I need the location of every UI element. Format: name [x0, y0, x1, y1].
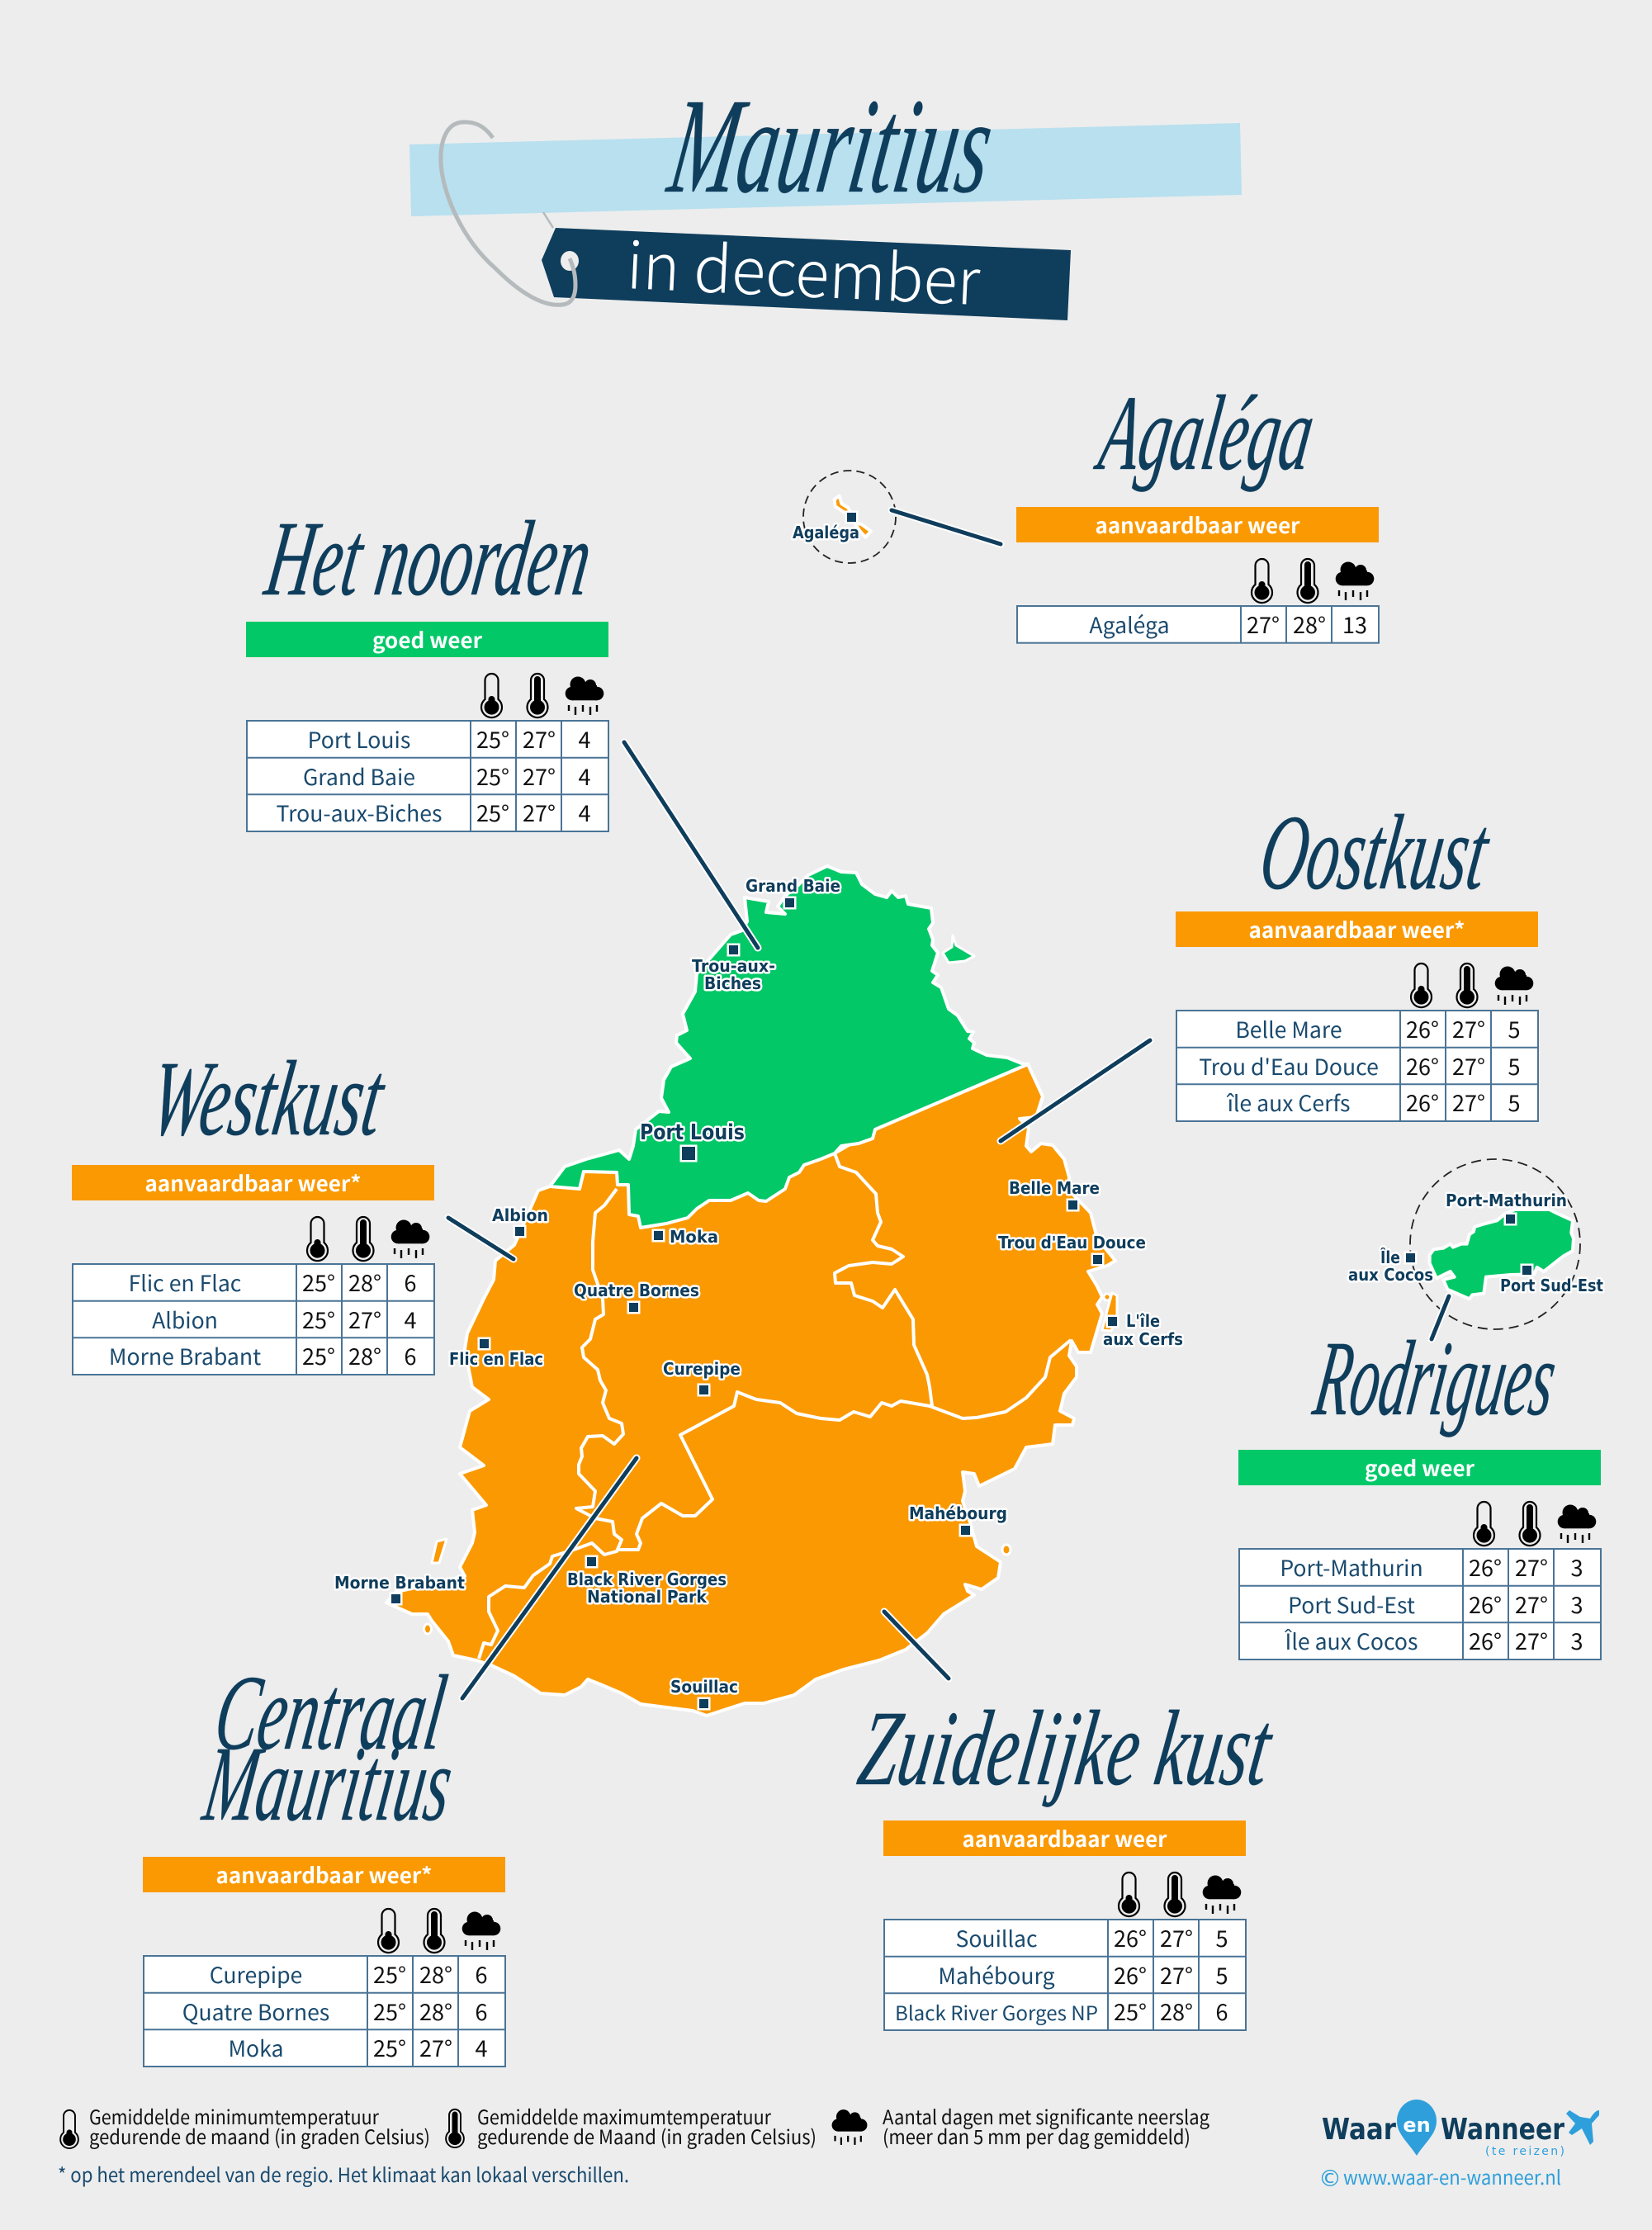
- panel body: [1238, 1450, 1601, 1659]
- table: [144, 1956, 505, 2067]
- table: 6: [405, 1266, 416, 1298]
- title: Mauritius: Mauritius: [660, 70, 1002, 221]
- orange regions: [386, 1064, 1115, 1716]
- table: 4: [405, 1303, 416, 1335]
- table: 25°: [302, 1303, 335, 1335]
- table: 27°: [523, 722, 556, 755]
- table: Port-Mathurin: [1280, 1551, 1423, 1583]
- table: 3: [1570, 1551, 1583, 1583]
- label: Souillac: Souillac: [670, 1677, 738, 1697]
- table: Morne Brabant: [109, 1339, 261, 1371]
- table: 25°: [476, 722, 509, 755]
- label: L'île aux Cerfs: [1103, 1311, 1183, 1349]
- table: Port Sud-Est: [1288, 1588, 1415, 1620]
- dashed circle: [803, 471, 896, 563]
- table: 28°: [1160, 1995, 1193, 2027]
- label: Trou-aux-Biches: Trou-aux-: [692, 956, 775, 976]
- icons: [1411, 963, 1533, 1007]
- table: 27°: [1452, 1049, 1485, 1082]
- table: [1176, 1011, 1538, 1121]
- panel body: [1176, 911, 1538, 1121]
- marker squares: [391, 513, 1531, 1708]
- subtitle: in december: [625, 215, 983, 324]
- table: 28°: [348, 1339, 381, 1371]
- label: Quatre Bornes: Quatre Bornes: [574, 1281, 699, 1300]
- banner: [143, 1857, 505, 1892]
- table: 5: [1215, 1921, 1228, 1953]
- heading: Zuidelijke kust: [851, 1689, 1280, 1808]
- legend: maximum temperature: [446, 2101, 817, 2150]
- table: 26°: [1469, 1551, 1502, 1583]
- table: 27°: [523, 796, 556, 828]
- title band: [409, 123, 1242, 216]
- island: [1430, 1210, 1574, 1299]
- table: 25°: [302, 1266, 335, 1298]
- logo tagline: (te reizen): [1485, 2145, 1564, 2158]
- label: Black River Gorges National Park: Black River Gorges: [567, 1570, 727, 1589]
- table: 26°: [1406, 1049, 1439, 1082]
- heading: [196, 1654, 460, 1844]
- table: Trou d'Eau Douce: [1199, 1049, 1379, 1082]
- table: 6: [1215, 1995, 1228, 2027]
- tag string: [543, 212, 553, 228]
- panel: Agaléga: [1016, 374, 1379, 643]
- icons: [1119, 1873, 1241, 1916]
- banner: [1238, 1450, 1601, 1485]
- banner: aanvaardbaar weer: [1095, 509, 1300, 540]
- heading: Mauritius: [196, 1725, 460, 1844]
- table: 28°: [348, 1266, 381, 1298]
- island: Ile d'Ambre: [943, 935, 974, 963]
- tag hole: [561, 251, 579, 271]
- callout: Westkust: [448, 1218, 514, 1259]
- table: île aux Cerfs: [1227, 1086, 1350, 1118]
- logo wordmark left: Waar: [1322, 2113, 1396, 2147]
- banner: aanvaardbaar weer*: [216, 1859, 433, 1890]
- table: 27°: [1452, 1086, 1485, 1118]
- label: Mahébourg: Mahébourg: [909, 1503, 1007, 1523]
- table: 27°: [1515, 1588, 1548, 1620]
- table: Trou-aux-Biches: [277, 796, 442, 828]
- table: Agaléga: [1089, 608, 1170, 640]
- table: 25°: [373, 1958, 406, 1990]
- table: 27°: [1515, 1624, 1548, 1656]
- table: 26°: [1469, 1588, 1502, 1620]
- legend: maximum temperature: gedurende de Maand (in graden Celsius): [477, 2121, 817, 2150]
- legend: minimum temperature: Gemiddelde minimumtemperatuur: [89, 2101, 380, 2130]
- table: Curepipe: [210, 1958, 302, 1990]
- label: Agaléga: Agaléga: [793, 523, 859, 542]
- label: Flic en Flac: Flic en Flac: [449, 1349, 543, 1369]
- banner: goed weer: [1365, 1452, 1475, 1483]
- table: 6: [476, 1958, 487, 1990]
- table: 4: [578, 722, 591, 755]
- panel body: [883, 1820, 1246, 2030]
- footnote: * op het merendeel van de regio. Het klimaat kan lokaal verschillen.: [58, 2159, 629, 2188]
- heading: Westkust: [143, 1039, 393, 1158]
- website: www.waar-en-wanneer.nl: [1343, 2161, 1561, 2190]
- logo en: en: [1403, 2114, 1431, 2137]
- table: Mahébourg: [938, 1958, 1055, 1991]
- table: Flic en Flac: [129, 1266, 241, 1298]
- table: 27°: [1247, 608, 1280, 640]
- logo wordmark right: Wanneer: [1441, 2113, 1564, 2147]
- panel: Westkust: [72, 1039, 434, 1375]
- banner: goed weer: [372, 624, 483, 655]
- title block: [409, 70, 1242, 324]
- panel: Oostkust: [1176, 793, 1538, 1121]
- label: Morne Brabant: Morne Brabant: [334, 1573, 465, 1593]
- banner: [246, 622, 608, 657]
- website: ©: [1318, 2165, 1342, 2192]
- banner: aanvaardbaar weer*: [1248, 914, 1465, 945]
- table: 5: [1215, 1958, 1228, 1991]
- label: Black River Gorges National Park: National Park: [587, 1587, 708, 1607]
- label: Île aux Cocos: aux Cocos: [1348, 1265, 1433, 1285]
- table: 3: [1570, 1588, 1583, 1620]
- table: 26°: [1114, 1921, 1147, 1953]
- table: [1239, 1549, 1601, 1659]
- map of Mauritius: [386, 866, 1117, 1716]
- panel: Zuidelijke kust: [851, 1689, 1280, 2030]
- table: 5: [1508, 1049, 1521, 1082]
- legend: minimum temperature: gedurende de maand (in graden Celsius): [89, 2121, 430, 2150]
- legend: precipitation: (meer dan 5 mm per dag gemiddeld): [883, 2121, 1190, 2150]
- label: Port Sud-Est: Port Sud-Est: [1500, 1276, 1603, 1295]
- table: 26°: [1406, 1086, 1439, 1118]
- label: Belle Mare: Belle Mare: [1009, 1178, 1100, 1198]
- table: 27°: [348, 1303, 381, 1335]
- banner: [1016, 507, 1379, 542]
- region boundaries: [479, 1153, 1071, 1659]
- icons: [1474, 1502, 1596, 1546]
- dashed circle: [1410, 1159, 1580, 1329]
- table: 27°: [1160, 1921, 1193, 1953]
- inset: Agaléga: [803, 471, 1001, 563]
- table: 3: [1570, 1624, 1583, 1656]
- banner: aanvaardbaar weer*: [145, 1167, 362, 1198]
- small islands: [424, 1293, 1117, 1634]
- panel: Centraal Mauritius: [143, 1654, 505, 2067]
- table: 4: [578, 796, 591, 828]
- logo pin: [1397, 2100, 1437, 2156]
- banner: [1176, 911, 1538, 947]
- table: Black River Gorges NP: [895, 1997, 1098, 2026]
- table: 25°: [1114, 1995, 1147, 2027]
- label: Albion: Albion: [492, 1205, 548, 1225]
- legend: maximum temperature: Gemiddelde maximumtemperatuur: [477, 2101, 772, 2130]
- table: 27°: [419, 2031, 452, 2063]
- inset: Rodrigues: [1410, 1159, 1580, 1339]
- table: Grand Baie: [303, 760, 415, 792]
- icons: [378, 1909, 500, 1953]
- label: Black River Gorges National Park: [567, 1570, 727, 1607]
- panel body: [1016, 507, 1379, 643]
- banner: [883, 1820, 1246, 1856]
- callout line: [1432, 1296, 1449, 1339]
- legend: [58, 2101, 1209, 2188]
- table: 4: [476, 2031, 487, 2063]
- table: 26°: [1469, 1624, 1502, 1656]
- table: Souillac: [955, 1921, 1038, 1953]
- table: 28°: [419, 1958, 452, 1990]
- table: [73, 1264, 434, 1375]
- logo plane: [1566, 2110, 1599, 2145]
- table: 27°: [523, 760, 556, 792]
- legend: precipitation: [832, 2101, 1209, 2150]
- heading: Het noorden: [258, 500, 599, 618]
- legend: precipitation: Aantal dagen met significante neerslag: [883, 2101, 1209, 2130]
- label: Île aux Cocos: Île: [1380, 1248, 1400, 1267]
- table: 25°: [373, 1995, 406, 2027]
- icons: [1252, 559, 1374, 603]
- icons: [481, 674, 604, 717]
- table: [884, 1920, 1246, 2030]
- legend: minimum temperature: [60, 2101, 430, 2150]
- callout: Zuidelijke kust: [884, 1612, 949, 1678]
- table: 6: [405, 1339, 416, 1371]
- table: Moka: [228, 2031, 284, 2063]
- table: [1017, 606, 1379, 643]
- callout line: [892, 510, 1001, 544]
- table: 6: [476, 1995, 487, 2027]
- label: Moka: Moka: [670, 1227, 718, 1247]
- table: Albion: [152, 1303, 218, 1335]
- tag: [542, 228, 1071, 320]
- heading: Centraal: [207, 1654, 453, 1773]
- panel body: [246, 622, 608, 831]
- island: [835, 496, 871, 537]
- label: Île aux Cocos: [1348, 1248, 1433, 1285]
- label: Grand Baie: Grand Baie: [746, 876, 840, 896]
- label: Curepipe: Curepipe: [663, 1359, 741, 1379]
- tag ring: [441, 122, 575, 305]
- label: Port Louis: Port Louis: [640, 1120, 745, 1145]
- panel body: [143, 1857, 505, 2067]
- table: 13: [1342, 608, 1367, 640]
- heading: Agaléga: [1089, 374, 1322, 493]
- label: Trou-aux-Biches: [692, 956, 775, 993]
- label: Port-Mathurin: Port-Mathurin: [1446, 1191, 1567, 1210]
- panel: Rodrigues: [1238, 1319, 1601, 1659]
- label: Trou-aux-Biches: Biches: [704, 973, 761, 993]
- table: Île aux Cocos: [1285, 1624, 1418, 1656]
- table: [247, 721, 608, 831]
- table: 5: [1508, 1086, 1521, 1118]
- table: 27°: [1452, 1012, 1485, 1044]
- heading: Oostkust: [1252, 793, 1498, 912]
- map labels and markers: [334, 513, 1603, 1708]
- table: 25°: [476, 796, 509, 828]
- green region: Het noorden: [550, 866, 1028, 1228]
- table: 26°: [1406, 1012, 1439, 1044]
- table: 25°: [476, 760, 509, 792]
- table: Port Louis: [308, 722, 410, 755]
- callout: Oostkust: [1001, 1040, 1150, 1141]
- table: 26°: [1114, 1958, 1147, 1991]
- callout: Centraal Mauritius: [462, 1458, 637, 1698]
- table: 28°: [419, 1995, 452, 2027]
- table: 25°: [373, 2031, 406, 2063]
- table: 25°: [302, 1339, 335, 1371]
- table: 27°: [1515, 1551, 1548, 1583]
- table: 5: [1508, 1012, 1521, 1044]
- label: L'île aux Cerfs: L'île: [1126, 1311, 1160, 1331]
- banner: aanvaardbaar weer: [963, 1823, 1167, 1854]
- label: L'île aux Cerfs: aux Cerfs: [1103, 1329, 1183, 1349]
- panel body: [72, 1165, 434, 1375]
- logo: Waar en Wanneer: [1318, 2100, 1599, 2192]
- table: Quatre Bornes: [182, 1995, 329, 2027]
- banner: [72, 1165, 434, 1200]
- table: 28°: [1293, 608, 1326, 640]
- label: Trou d'Eau Douce: Trou d'Eau Douce: [998, 1233, 1146, 1252]
- table: Belle Mare: [1235, 1012, 1342, 1044]
- panel: Het noorden: [246, 500, 608, 831]
- callout: Het noorden: [624, 742, 758, 948]
- table: 27°: [1160, 1958, 1193, 1991]
- table: 4: [578, 760, 591, 792]
- callout lines: [448, 742, 1150, 1698]
- icons: [307, 1217, 429, 1261]
